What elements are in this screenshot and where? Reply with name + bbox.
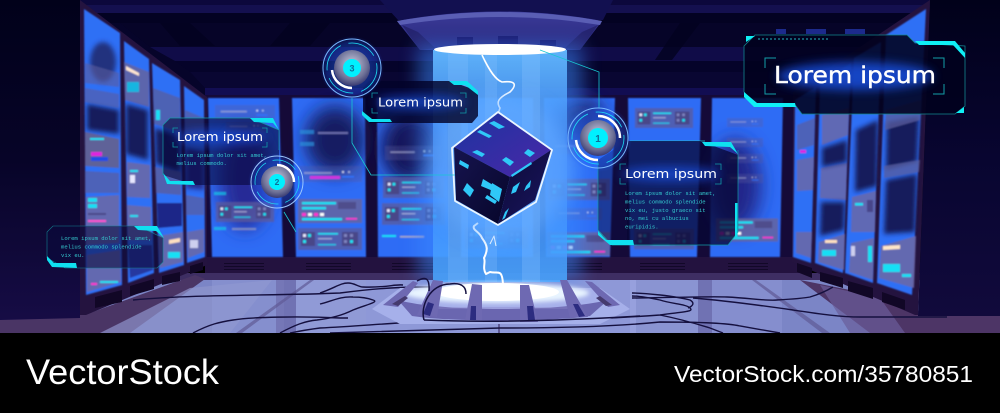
- cabinet base vents: [205, 257, 805, 274]
- panel: right server rack: [792, 0, 1000, 316]
- light beam: [418, 44, 582, 282]
- text block: callout 1: [625, 190, 716, 230]
- left cabinet 2: [124, 41, 154, 283]
- right wall: [918, 0, 1000, 316]
- cabinet 6: [628, 98, 701, 257]
- text block: callout 2: Lorem ipsum dolor sit amet,: [176, 152, 267, 159]
- right cabinet 1: [793, 87, 816, 263]
- panel: callout 3: [362, 81, 478, 123]
- panel: back server cabinets: [205, 96, 805, 274]
- text block: bottom left: Lorem ipsum dolor sit amet,: [61, 235, 152, 242]
- dial number 3: 3: [349, 64, 355, 74]
- text block: bottom left: vix eu.: [61, 252, 84, 259]
- footer logo: VectorStock: [26, 353, 220, 392]
- text block: bottom left: [61, 235, 152, 259]
- text block: callout 2: [176, 152, 267, 167]
- left cabinet 1: [84, 9, 122, 295]
- ceiling: [0, 0, 1000, 100]
- dial number 1: 1: [595, 134, 601, 145]
- floor: [0, 273, 1000, 333]
- cabinet 7: [709, 98, 783, 257]
- cabinet 5: [544, 96, 615, 257]
- heading: callout 3: Lorem ipsum: [378, 96, 463, 110]
- light source ellipse: [434, 44, 566, 55]
- right cabinet 3: [845, 42, 881, 283]
- text block: callout 1: vix eu, justo graeco sit: [625, 207, 706, 214]
- footer url: VectorStock.com/35780851: [674, 361, 973, 387]
- text block: callout 2: melius commodo.: [176, 160, 227, 167]
- connector lines: [284, 50, 705, 232]
- text block: bottom left: melius commodo splendide: [61, 244, 142, 250]
- text block: callout 1: melius commodo splendide: [625, 198, 706, 206]
- panel: bottom left callout: [47, 226, 164, 268]
- heading: callout 1: Lorem ipsum: [625, 166, 717, 181]
- heading: top right: Lorem ipsum: [774, 63, 936, 89]
- panel: top right callout: [744, 35, 965, 114]
- rack frame: [792, 0, 930, 315]
- right cabinet 2: [815, 63, 851, 273]
- cabinet 4: [461, 98, 533, 257]
- right cabinet 4: [877, 9, 926, 295]
- panel: callout 1: [598, 141, 738, 245]
- ceiling emitter: [380, 0, 613, 50]
- left cabinet 3: [152, 63, 184, 273]
- panel: callout 2: [163, 118, 279, 185]
- footer bar: [0, 333, 1000, 413]
- back wall: [205, 95, 805, 275]
- lightning bolts: [474, 55, 514, 284]
- heading: callout 2: Lorem ipsum: [177, 130, 263, 144]
- power cables: [417, 278, 640, 321]
- text block: callout 1: euripidis.: [625, 224, 659, 230]
- panel: left server rack: [0, 0, 207, 320]
- left cabinet 4: [184, 86, 205, 263]
- cube electric outline: [452, 112, 552, 225]
- emitter fins: [383, 280, 620, 322]
- left wall: [0, 0, 80, 320]
- icon: hud dial 3: [320, 36, 384, 100]
- cabinet 1: [208, 98, 283, 257]
- rack frame: [80, 0, 207, 315]
- icon: hud dial 1: [564, 104, 632, 172]
- text block: callout 1: no, mei cu albucius: [625, 215, 689, 222]
- icon: hud dial 2: [248, 153, 306, 211]
- dial number 2: 2: [275, 177, 280, 187]
- text block: callout 1: Lorem ipsum dolor sit amet,: [625, 190, 716, 197]
- cabinet 2: [292, 98, 366, 257]
- wires on floor: [133, 283, 947, 333]
- cube: [452, 112, 552, 225]
- base device: [372, 278, 640, 324]
- cube glow: [428, 96, 572, 240]
- cabinet 3: [377, 98, 449, 257]
